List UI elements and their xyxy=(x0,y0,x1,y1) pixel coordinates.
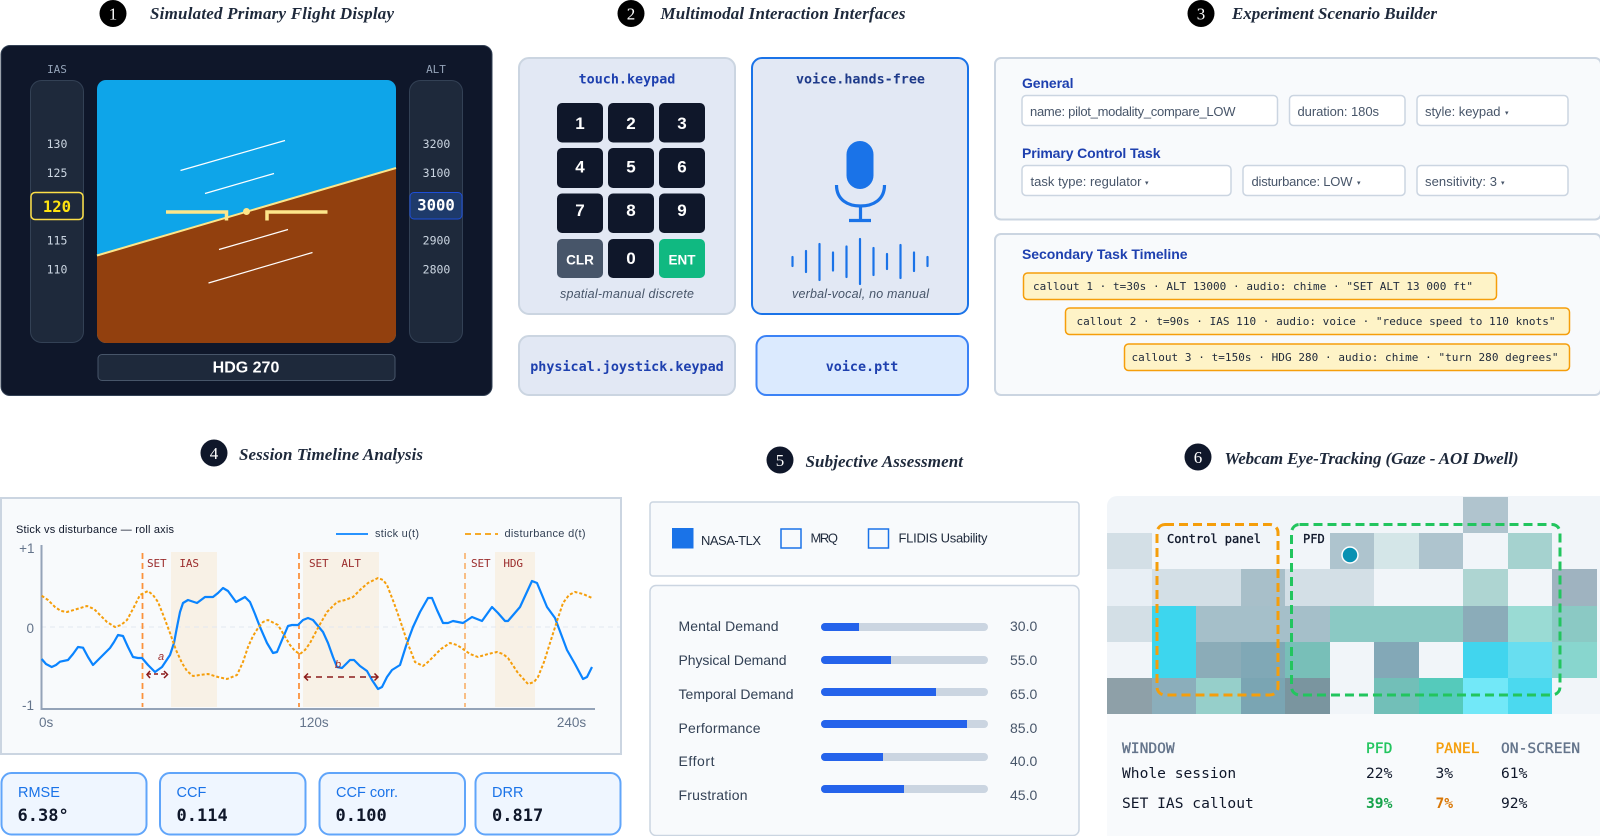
heading 5: Subjective Assessment: Subjective Assessment xyxy=(806,452,964,471)
panel: AOI dwell table: WINDOW xyxy=(1122,740,1175,757)
row: Temporal Demand xyxy=(678,686,1037,702)
chart legend xyxy=(336,528,586,540)
altitude tape: 2900 xyxy=(423,234,450,248)
metric card: RMSE: RMSE xyxy=(18,785,60,801)
AOI: control panel xyxy=(1157,524,1278,695)
heading 6: Webcam Eye-Tracking xyxy=(1184,444,1518,470)
metric card: CCF corr. xyxy=(320,773,465,834)
AOI: PFD: PFD xyxy=(1303,532,1325,546)
icon: microphone xyxy=(836,141,884,220)
panel: AOI dwell table: Whole session xyxy=(1122,765,1236,782)
metric card: DRR: DRR xyxy=(492,785,523,801)
annotations: reaction intervals xyxy=(147,651,378,680)
legend: NASA-TLX: NASA-TLX xyxy=(701,533,761,548)
metric card: CCF corr.: 0.100 xyxy=(336,806,387,826)
row: Physical Demand xyxy=(678,652,1037,668)
callout markers xyxy=(142,553,465,707)
row: Performance xyxy=(678,720,1037,736)
keypad buttons: 8 xyxy=(626,201,636,220)
form fields: general: ▾ xyxy=(1505,110,1509,117)
heatmap cells xyxy=(1107,497,1597,714)
keypad buttons: 0 xyxy=(626,249,636,268)
attitude indicator xyxy=(97,80,396,343)
heading 3: Experiment Scenario Builder xyxy=(1188,0,1437,27)
panel: AOI dwell table: 61% xyxy=(1501,765,1528,782)
panel: scenario general and primary task form xyxy=(995,58,1600,220)
panel: AOI dwell table: PFD xyxy=(1366,740,1392,757)
keypad buttons xyxy=(557,103,705,278)
IAS speed tape: 115 xyxy=(47,234,67,248)
heading 6: Webcam Eye-Tracking: 6 xyxy=(1194,448,1202,467)
heading 1: Simulated Primary Flight Display: Simulated Primary Flight Display xyxy=(150,4,394,23)
panel: physical joystick keypad: physical.joystick.keypad xyxy=(530,359,724,375)
legend: MRQ: MRQ xyxy=(810,530,838,546)
panel: AOI dwell table: 3% xyxy=(1436,765,1453,782)
IAS speed tape: IAS xyxy=(47,63,67,76)
row: Physical Demand: 55.0 xyxy=(1010,652,1037,668)
form fields: primary control task: ▾ xyxy=(1145,180,1149,187)
panel: primary flight display xyxy=(1,46,492,396)
row: Mental Demand: 30.0 xyxy=(1010,618,1037,634)
callout labels: SET IAS xyxy=(147,557,199,570)
IAS speed tape: 130 xyxy=(47,137,67,151)
row: Frustration xyxy=(678,785,1037,803)
keypad buttons: 9 xyxy=(677,201,687,220)
keypad buttons: 4 xyxy=(575,158,585,176)
keypad buttons: 2 xyxy=(626,114,636,133)
callout labels: SET HDG xyxy=(471,557,523,570)
heading 4: Session Timeline Analysis: 4 xyxy=(210,444,219,463)
callout 2 xyxy=(1066,308,1570,334)
metric card: DRR xyxy=(476,773,620,834)
axes: 0s xyxy=(39,715,54,730)
keypad buttons: CLR xyxy=(566,252,594,268)
row: Performance: Performance xyxy=(678,720,761,736)
heading 5: Subjective Assessment: 5 xyxy=(776,451,784,470)
axes: -1 xyxy=(22,698,34,713)
panel: secondary task timeline xyxy=(995,234,1600,395)
panel: voice hands-free xyxy=(752,58,968,314)
panel: questionnaire selector xyxy=(650,502,1079,576)
stick line xyxy=(42,581,592,689)
form fields: primary control task: ▾ xyxy=(1357,180,1361,187)
heading 2: Multimodal Interaction Interfaces: Multimodal Interaction Interfaces xyxy=(660,4,906,23)
disturbance line xyxy=(42,578,592,684)
row: Performance: 85.0 xyxy=(1010,720,1037,736)
callout 3: callout 3 · t=150s · HDG 280 · audio: chime · "turn 280 degrees" xyxy=(1132,351,1558,364)
legend: NASA-TLX xyxy=(672,528,761,548)
row: Temporal Demand: Temporal Demand xyxy=(678,686,794,702)
heading 2: Multimodal Interaction Interfaces xyxy=(618,0,906,27)
panel: AOI dwell table: ON-SCREEN xyxy=(1501,740,1580,757)
AOI: PFD xyxy=(1292,524,1560,695)
heading 2: Multimodal Interaction Interfaces: 2 xyxy=(627,4,635,24)
panel: AOI dwell table: 39% xyxy=(1366,795,1393,812)
callout 1: callout 1 · t=30s · ALT 13000 · audio: chime · "SET ALT 13 000 ft" xyxy=(1033,280,1473,293)
metric card: RMSE: 6.38° xyxy=(18,806,69,826)
form fields: general: style: keypad xyxy=(1425,104,1500,119)
heading 1: Simulated Primary Flight Display xyxy=(100,0,394,27)
altitude tape: ALT xyxy=(426,63,446,76)
form fields: primary control task: disturbance: LOW xyxy=(1252,174,1353,189)
panel: secondary task timeline: Secondary Task Timeline xyxy=(1022,246,1188,262)
gaze point xyxy=(1342,547,1358,563)
heading readout xyxy=(98,354,395,380)
panel: voice push-to-talk xyxy=(756,336,968,395)
axes: 0 xyxy=(26,621,34,636)
keypad buttons: 1 xyxy=(575,114,585,133)
panel: gaze heatmap xyxy=(1107,496,1600,714)
callout response windows xyxy=(171,552,535,707)
row: Physical Demand: Physical Demand xyxy=(678,652,786,668)
IAS speed tape: 120 xyxy=(43,198,71,216)
callout labels: SET ALT xyxy=(309,557,361,570)
altitude tape: 3200 xyxy=(423,137,450,151)
annotations: reaction intervals: a xyxy=(158,651,164,663)
annotations: reaction intervals: b xyxy=(335,659,341,671)
callout 2: callout 2 · t=90s · IAS 110 · audio: voice · "reduce speed to 110 knots" xyxy=(1076,315,1556,328)
callout 3 xyxy=(1124,344,1570,370)
form fields: primary control task xyxy=(1022,166,1568,196)
panel: session timeline chart: Stick vs disturbance — roll axis xyxy=(16,524,174,536)
panel: session timeline chart xyxy=(1,498,621,754)
row: Frustration: Frustration xyxy=(678,787,748,803)
keypad buttons: ENT xyxy=(668,252,696,268)
keypad buttons: 3 xyxy=(677,114,687,133)
panel: voice hands-free: verbal-vocal, no manual xyxy=(792,287,930,301)
IAS speed tape: 125 xyxy=(47,166,67,180)
AOI: control panel: Control panel xyxy=(1167,532,1261,546)
chart legend: stick u(t) xyxy=(375,528,419,540)
heading 5: Subjective Assessment xyxy=(766,446,964,474)
panel: voice hands-free: voice.hands-free xyxy=(796,72,925,88)
panel: AOI dwell table: SET IAS callout xyxy=(1122,795,1254,812)
panel: AOI dwell table: 92% xyxy=(1501,795,1528,812)
panel: NASA-TLX scores xyxy=(650,586,1079,836)
callout labels xyxy=(147,557,523,570)
row: Mental Demand: Mental Demand xyxy=(678,618,778,634)
panel: AOI dwell table: 7% xyxy=(1436,795,1453,812)
metric card: RMSE xyxy=(2,773,146,834)
heading 3: Experiment Scenario Builder: Experiment Scenario Builder xyxy=(1231,4,1437,23)
row: Mental Demand xyxy=(678,618,1037,634)
form fields: primary control task: sensitivity: 3 xyxy=(1425,174,1497,189)
heading readout: HDG 270 xyxy=(213,360,279,376)
legend: FLIDIS Usability xyxy=(868,529,988,548)
keypad buttons: 5 xyxy=(626,158,636,176)
altitude tape: 2800 xyxy=(423,262,450,276)
icon: sound wave xyxy=(792,239,928,284)
form fields: general xyxy=(1022,96,1568,126)
panel: AOI dwell table: 22% xyxy=(1366,765,1393,782)
altitude tape xyxy=(410,63,462,342)
panel: touch keypad xyxy=(519,58,735,314)
panel: scenario general and primary task form: General xyxy=(1022,75,1074,91)
heading 4: Session Timeline Analysis: Session Timeline Analysis xyxy=(239,445,423,464)
axes: +1 xyxy=(19,541,34,556)
metric card: CCF corr.: CCF corr. xyxy=(336,785,398,801)
altitude tape: 3100 xyxy=(423,166,450,180)
axes: 120s xyxy=(299,715,329,730)
keypad buttons: 7 xyxy=(575,201,585,220)
axes: 240s xyxy=(557,715,586,730)
legend: MRQ xyxy=(781,529,838,548)
heading 6: Webcam Eye-Tracking: Webcam Eye-Tracking (Gaze - AOI Dwell) xyxy=(1224,449,1518,468)
panel: AOI dwell table xyxy=(1107,714,1600,836)
row: Temporal Demand: 65.0 xyxy=(1010,686,1037,702)
panel: scenario general and primary task form: Primary Control Task xyxy=(1022,145,1161,161)
row: Effort: Effort xyxy=(678,753,715,769)
metric card: DRR: 0.817 xyxy=(492,806,543,826)
heading 3: Experiment Scenario Builder: 3 xyxy=(1197,4,1205,24)
heading 1: Simulated Primary Flight Display: 1 xyxy=(109,4,117,24)
panel: physical joystick keypad xyxy=(519,336,735,395)
row: Effort xyxy=(678,753,1037,769)
metric card: CCF xyxy=(160,773,306,834)
panel: AOI dwell table: PANEL xyxy=(1436,740,1480,757)
form fields: general: name: pilot_modality_compare_LOW xyxy=(1030,104,1236,119)
IAS speed tape: 110 xyxy=(47,262,67,276)
metric card: CCF: 0.114 xyxy=(176,806,228,826)
altitude tape: 3000 xyxy=(417,196,455,214)
form fields: primary control task: ▾ xyxy=(1501,180,1505,187)
panel: touch keypad: spatial-manual discrete xyxy=(560,287,694,301)
row: Effort: 40.0 xyxy=(1010,753,1037,769)
keypad buttons: 6 xyxy=(677,158,687,176)
row: Frustration: 45.0 xyxy=(1010,787,1037,803)
panel: voice push-to-talk: voice.ptt xyxy=(826,359,898,375)
form fields: primary control task: task type: regulator xyxy=(1030,174,1142,189)
callout 1 xyxy=(1024,273,1496,300)
axes xyxy=(19,541,620,730)
form fields: general: duration: 180s xyxy=(1298,104,1380,119)
heading 4: Session Timeline Analysis xyxy=(200,440,423,466)
panel: touch keypad: touch.keypad xyxy=(579,72,675,88)
legend: FLIDIS Usability: FLIDIS Usability xyxy=(898,530,988,546)
chart legend: disturbance d(t) xyxy=(504,528,586,540)
IAS speed tape xyxy=(30,63,84,342)
metric card: CCF: CCF xyxy=(176,785,206,801)
